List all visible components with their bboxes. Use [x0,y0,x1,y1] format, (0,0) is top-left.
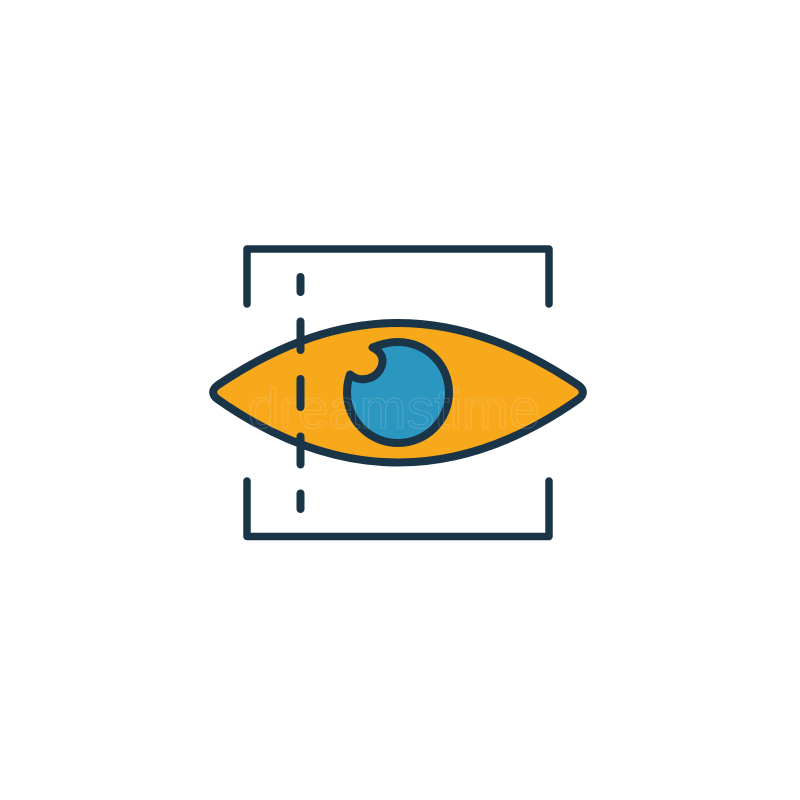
icon: pupil with highlight notch [347,342,449,443]
scan frame: bottom bracket [247,481,549,536]
dashed scan line [296,277,304,509]
icon: eye shape [213,323,583,462]
watermark text: dreamstime [248,377,540,440]
scan frame: top bracket [247,249,549,304]
